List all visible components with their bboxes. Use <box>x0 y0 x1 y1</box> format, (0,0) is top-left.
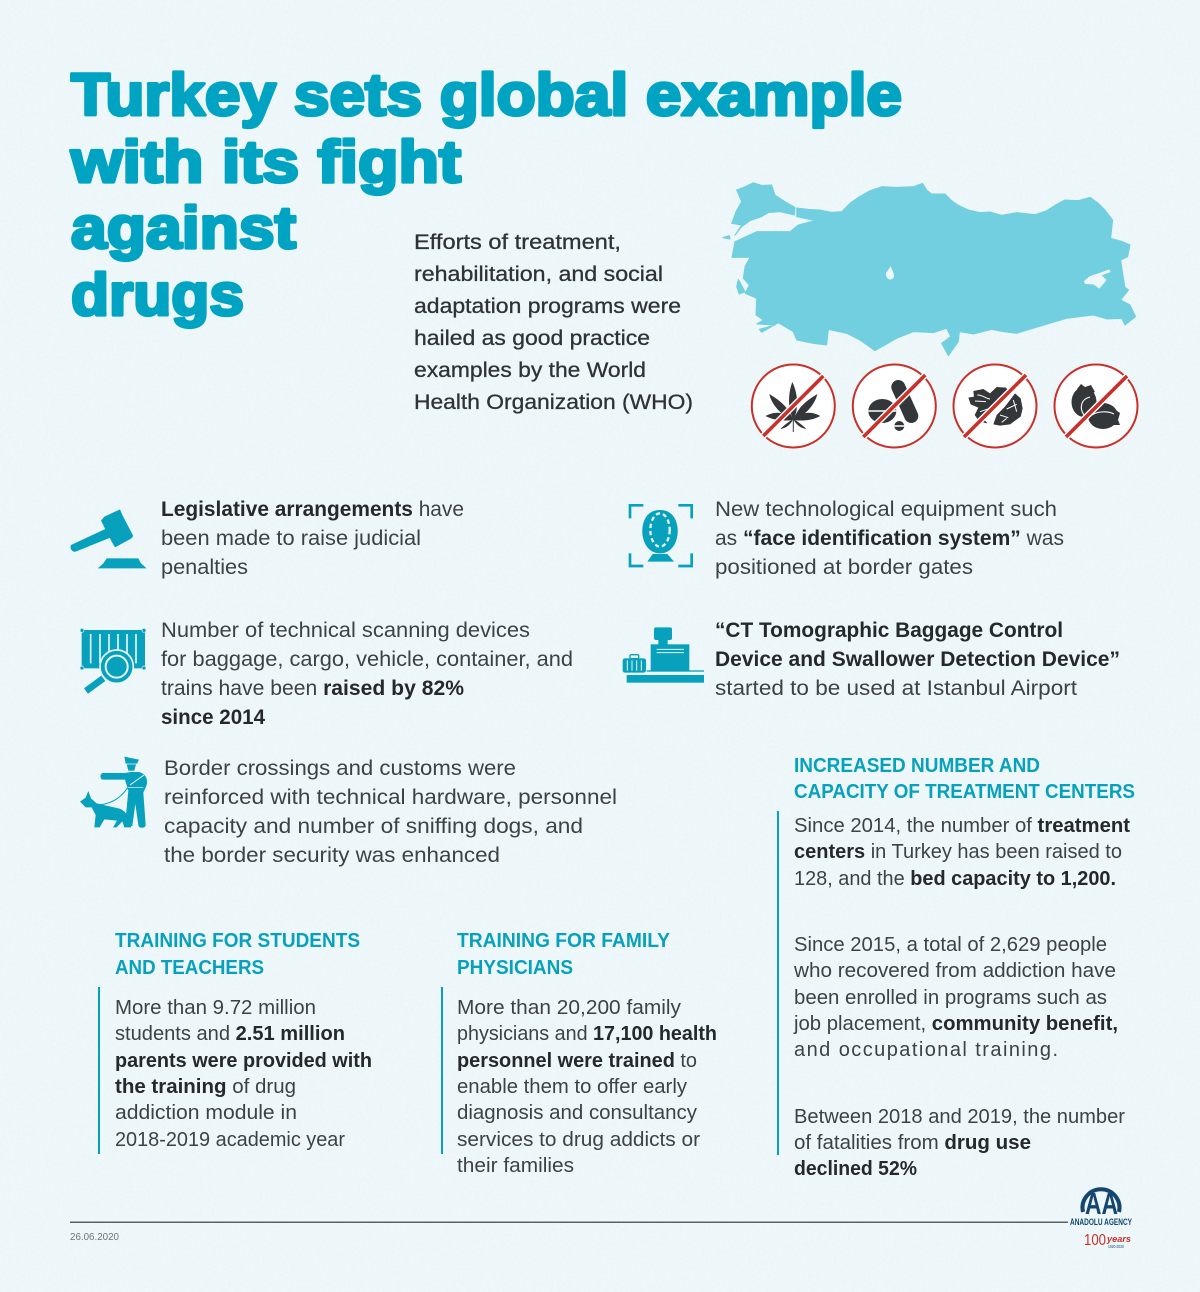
logo: Anadolu Agency: AA <box>1085 1186 1118 1221</box>
heading: students and teachers <box>115 930 360 979</box>
icon: baggage scanner <box>623 627 704 683</box>
text: CT device <box>715 618 1120 700</box>
text: family physicians body: personnel were trained to <box>457 1050 697 1072</box>
heading: family physicians: PHYSICIANS <box>457 957 573 979</box>
text: face identification <box>715 497 1064 579</box>
icon: no substance <box>954 364 1036 448</box>
text: border crossings <box>164 756 617 867</box>
text: treatment centers body: been enrolled in programs such as <box>794 987 1107 1009</box>
text: treatment centers body: who recovered from addiction have <box>793 960 1116 982</box>
text: legislative arrangements: been made to raise judicial <box>161 526 421 550</box>
title: against <box>71 195 296 261</box>
icon: no cannabis <box>752 364 835 448</box>
text: face identification: positioned at border gates <box>715 555 973 579</box>
text: face identification: New technological equipment such <box>715 497 1057 521</box>
text: students and teachers body: 2018-2019 academic year <box>115 1129 345 1151</box>
text: CT device: Device and Swallower Detection Device” <box>715 647 1120 671</box>
icon: face identification <box>630 505 692 566</box>
text: scanning devices: for baggage, cargo, vehicle, container, and <box>161 647 573 671</box>
text: family physicians body: enable them to offer early <box>457 1076 687 1098</box>
logo: Anadolu Agency: years <box>1106 1234 1131 1244</box>
text: legislative arrangements <box>161 497 464 579</box>
text: treatment centers body: and occupational training. <box>794 1039 1058 1061</box>
text: legislative arrangements: penalties <box>161 555 248 579</box>
text: family physicians body: diagnosis and consultancy <box>457 1102 697 1124</box>
text: scanning devices: Number of technical scanning devices <box>161 618 530 642</box>
text: scanning devices: trains have been raised by 82% <box>161 676 464 700</box>
intro text: Efforts of treatment, <box>414 230 621 254</box>
panel: training for students and teachers <box>98 930 372 1154</box>
icon: no pills <box>853 364 936 448</box>
panel: training for family physicians <box>441 930 717 1177</box>
text: treatment centers body: 128, and the bed capacity to 1,200. <box>794 868 1116 890</box>
text: CT device: started to be used at Istanbul Airport <box>715 676 1077 700</box>
text: students and teachers body: addiction module in <box>115 1102 297 1124</box>
text: legislative arrangements: Legislative arrangements have <box>161 497 464 521</box>
title: drugs <box>71 262 244 328</box>
icon: gavel <box>71 509 147 568</box>
icon: officer with dog <box>80 757 147 828</box>
text: family physicians body: physicians and 17,100 health <box>457 1023 717 1045</box>
panel: treatment centers <box>777 755 1135 1180</box>
intro text: examples by the World <box>414 358 646 382</box>
text: CT device: “CT Tomographic Baggage Control <box>715 618 1063 642</box>
text: border crossings: reinforced with technical hardware, personnel <box>164 785 617 809</box>
text: face identification: as “face identification system” was <box>715 526 1064 550</box>
logo: Anadolu Agency <box>1070 1186 1132 1249</box>
text: treatment centers body: Since 2015, a total of 2,629 people <box>794 934 1107 956</box>
text: border crossings: Border crossings and customs were <box>164 756 516 780</box>
text: treatment centers body <box>793 815 1130 1180</box>
text: family physicians body: their families <box>457 1155 574 1177</box>
text: treatment centers body: Since 2014, the number of treatment <box>794 815 1130 837</box>
text: border crossings: the border security was enhanced <box>164 843 500 867</box>
text: scanning devices <box>161 618 573 729</box>
text: family physicians body: More than 20,200 family <box>457 997 681 1019</box>
title <box>70 62 902 328</box>
intro text <box>414 230 693 414</box>
icon: scanned container <box>80 628 146 691</box>
heading: students and teachers: AND TEACHERS <box>115 957 264 979</box>
heading: treatment centers: CAPACITY OF TREATMENT CENTERS <box>794 781 1135 803</box>
map of Turkey <box>723 183 1136 356</box>
logo: Anadolu Agency: ANADOLU AGENCY <box>1070 1217 1132 1228</box>
text: students and teachers body: More than 9.72 million <box>115 997 316 1019</box>
intro text: Health Organization (WHO) <box>414 390 693 414</box>
heading: students and teachers: TRAINING FOR STUDENTS <box>115 930 360 952</box>
heading: treatment centers: INCREASED NUMBER AND <box>794 755 1040 777</box>
intro text: hailed as good practice <box>414 326 650 350</box>
heading: family physicians <box>457 930 671 979</box>
title: Turkey sets global example <box>71 62 902 128</box>
intro text: rehabilitation, and social <box>414 262 663 286</box>
text: treatment centers body: Between 2018 and 2019, the number <box>794 1106 1125 1128</box>
text: students and teachers body: parents were provided with <box>115 1050 372 1072</box>
logo: Anadolu Agency: 1920-2020 <box>1108 1244 1124 1249</box>
intro text: adaptation programs were <box>414 294 681 318</box>
heading: family physicians: TRAINING FOR FAMILY <box>457 930 671 952</box>
logo: Anadolu Agency: 100 <box>1084 1232 1106 1249</box>
text: border crossings: capacity and number of sniffing dogs, and <box>164 814 583 838</box>
text: students and teachers body <box>115 997 372 1151</box>
text: family physicians body: services to drug addicts or <box>457 1129 700 1151</box>
text: treatment centers body: of fatalities from drug use <box>794 1132 1031 1154</box>
text: students and teachers body: students and 2.51 million <box>115 1023 345 1045</box>
text: treatment centers body: declined 52% <box>794 1158 917 1180</box>
date: 26.06.2020 <box>70 1232 119 1243</box>
heading: treatment centers <box>794 755 1135 803</box>
text: students and teachers body: the training of drug <box>115 1076 296 1098</box>
title: with its fight <box>70 129 461 195</box>
text: treatment centers body: centers in Turkey has been raised to <box>794 841 1122 863</box>
text: scanning devices: since 2014 <box>161 705 265 729</box>
text: treatment centers body: job placement, community benefit, <box>793 1013 1118 1035</box>
text: family physicians body <box>457 997 717 1177</box>
icon: no poppy <box>1054 364 1138 448</box>
